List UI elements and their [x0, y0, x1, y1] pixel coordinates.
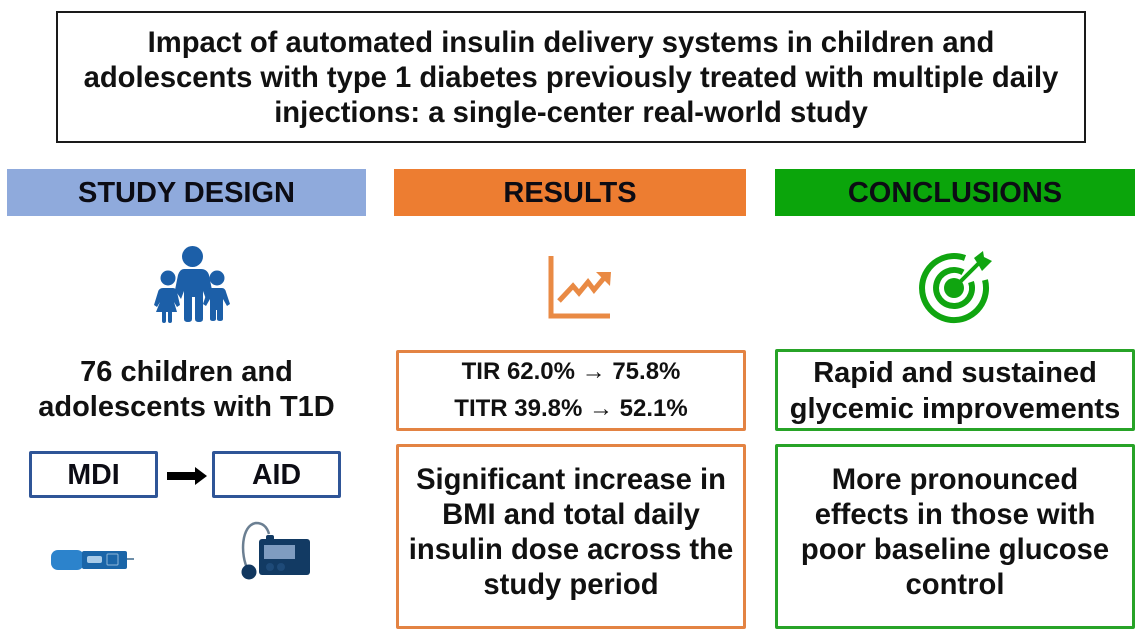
box: BMI and insulin dose: Significant increase in [416, 464, 726, 496]
box: BMI and insulin dose: insulin dose across the [409, 534, 733, 566]
box: AID: AID [252, 459, 301, 491]
title [56, 11, 1086, 143]
heading: conclusions: CONCLUSIONS [848, 177, 1062, 209]
box: rapid improvements: Rapid and sustained [813, 357, 1097, 389]
arrow: MDI to AID [167, 467, 207, 485]
heading: study design: STUDY DESIGN [78, 177, 295, 209]
heading: results [394, 169, 746, 216]
heading: study design [7, 169, 366, 216]
icon: family [154, 246, 230, 323]
heading: results: RESULTS [503, 177, 637, 209]
box: MDI: MDI [67, 459, 120, 491]
icon: insulin pump [242, 522, 310, 580]
box: pronounced effects: effects in those with [815, 498, 1095, 530]
box: pronounced effects [775, 444, 1135, 629]
box: rapid improvements: glycemic improvements [790, 393, 1120, 425]
box: pronounced effects: More pronounced [832, 464, 1078, 496]
box: BMI and insulin dose [396, 444, 746, 629]
box: rapid improvements [775, 349, 1135, 431]
icon: insulin pen [51, 550, 134, 570]
box: pronounced effects: control [906, 568, 1004, 600]
box: MDI [29, 451, 158, 498]
box: AID [212, 451, 341, 498]
title: adolescents with type 1 diabetes previously treated with multiple daily [84, 62, 1058, 94]
box: BMI and insulin dose: study period [483, 568, 659, 600]
title: Impact of automated insulin delivery systems in children and [148, 27, 994, 59]
box: TIR and TITR [396, 350, 746, 431]
box: BMI and insulin dose: BMI and total daily [442, 498, 700, 530]
box: TIR and TITR: TIR 62.0% → 75.8% [462, 358, 680, 385]
box: pronounced effects: poor baseline glucose [801, 534, 1109, 566]
heading: conclusions [775, 169, 1135, 216]
box: TIR and TITR: TITR 39.8% → 52.1% [454, 394, 688, 422]
text: participants: adolescents with T1D [38, 391, 335, 423]
text: participants [38, 356, 335, 423]
icon: target [919, 251, 992, 324]
icon: rising chart [548, 256, 611, 318]
title: injections: a single-center real-world study [274, 97, 868, 129]
text: participants: 76 children and [80, 356, 293, 388]
